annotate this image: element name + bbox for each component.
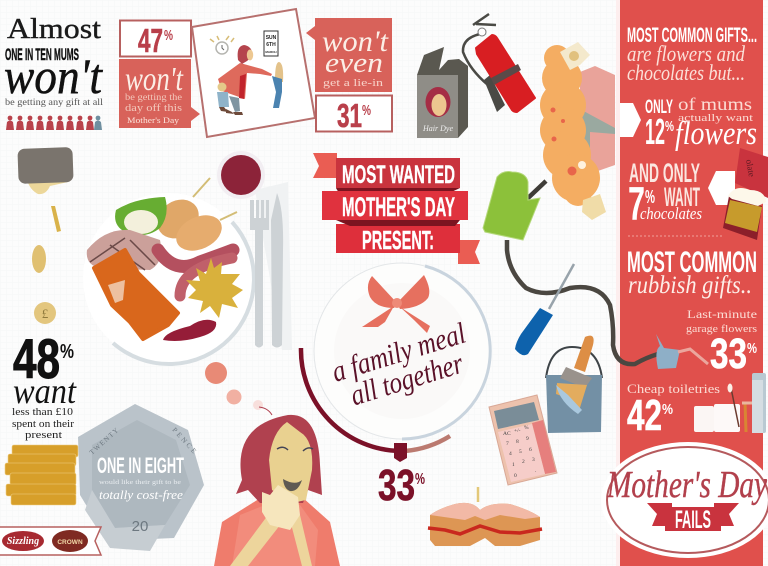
icon: calculator — [489, 395, 557, 485]
icon: calculator: 8 — [516, 439, 519, 445]
text: a family meal all together: all together — [347, 347, 467, 412]
block: almost one in ten mums: be getting any gift at all — [5, 97, 103, 108]
icon: screwdriver — [515, 264, 574, 355]
icon: calculator: +/- — [514, 428, 521, 434]
stat box: 47 percent — [120, 20, 191, 59]
icon: row of ten mums — [6, 116, 102, 130]
block: almost one in ten mums: ONE IN TEN MUMS — [5, 45, 79, 64]
stat box: 31 percent — [316, 96, 392, 134]
callout: won't even get a lie-in — [306, 18, 392, 92]
panel: serving plate — [314, 263, 490, 439]
icon: white hexagon pointer flowers — [620, 103, 641, 137]
heading: most common gifts — [627, 24, 757, 85]
logo: Sizzling: Sizzling — [7, 536, 39, 547]
chart: 33 percent arc gauge — [301, 348, 450, 510]
brand ribbon: logos — [0, 527, 101, 555]
stat: 48 percent want less than ten pounds: 48 — [13, 327, 60, 390]
icon: calendar — [264, 31, 278, 56]
callout: won't even get a lie-in: even — [325, 48, 383, 79]
logo: Crown: CROWN — [57, 539, 83, 546]
heading: most common gifts: are flowers and — [627, 41, 746, 66]
badge: mother's day fails oval — [601, 442, 768, 558]
icon: calculator: 6 — [529, 447, 532, 453]
callout: won't get the day off: day off this — [125, 103, 182, 114]
heading: most common rubbish gifts: rubbish gifts.. — [628, 272, 752, 299]
icon: calculator: % — [524, 425, 529, 431]
thought bubbles — [205, 362, 263, 410]
stat: cheap toiletries 42 percent: % — [662, 401, 673, 418]
ribbon: fails — [647, 503, 739, 534]
icon: calculator: 3 — [532, 457, 535, 463]
panel: twenty pence coin: ONE IN EIGHT — [97, 453, 184, 478]
banner: most wanted present: MOTHER'S DAY — [342, 192, 455, 222]
block: almost one in ten mums: Almost — [7, 14, 101, 45]
icon: calendar: 6TH — [266, 42, 276, 48]
icon: calculator: 2 — [522, 459, 525, 465]
panel: twenty pence coin: would like their gift to be — [99, 479, 181, 486]
stat: only 12 percent want flowers: 12 — [645, 111, 665, 152]
icon: calculator: 4 — [509, 451, 512, 457]
stat: garage flowers 33 percent: garage flowers — [686, 323, 757, 335]
icon: calculator: 9 — [526, 436, 529, 442]
icon: calculator: . — [535, 468, 537, 474]
panel: lie-in illustration card — [192, 9, 315, 137]
chart: 33 percent arc gauge: 33 — [378, 461, 415, 510]
icon: hair dye box — [417, 47, 468, 138]
callout: won't even get a lie-in: won't — [322, 25, 389, 58]
stat: only 12 percent want flowers: % — [665, 118, 674, 135]
stat: only 12 percent want flowers — [645, 94, 757, 152]
stat: only 12 percent want flowers: actually want — [678, 112, 753, 124]
stat: cheap toiletries 42 percent: Cheap toiletries — [627, 381, 720, 396]
banner: most wanted present — [313, 153, 480, 264]
icon: stack of gold coins — [5, 445, 78, 505]
divider: dashed line — [628, 235, 722, 237]
stat box: 31 percent: 31 — [337, 97, 362, 134]
stat: only 12 percent want flowers: ONLY — [645, 97, 673, 118]
icon: calculator: AC — [503, 431, 511, 437]
panel: twenty pence coin: TWENTY — [88, 426, 120, 456]
icon: calendar: SUN — [266, 35, 277, 41]
icon: white hexagon pointer chocolate — [708, 171, 735, 205]
icon: hair dye box: Hair Dye — [422, 124, 453, 133]
icon: calculator: 1 — [512, 462, 515, 468]
icon: half-eaten chocolate bar — [723, 148, 768, 240]
panel: twenty pence coin — [78, 404, 204, 551]
icon: cutlery and sauce — [217, 151, 292, 350]
stat: garage flowers 33 percent: % — [747, 340, 757, 357]
stat: only 7 percent want chocolates: AND ONLY — [629, 158, 700, 188]
icon: broken cake — [428, 487, 542, 546]
stat: garage flowers 33 percent: 33 — [710, 330, 747, 378]
stat box: 31 percent: % — [362, 102, 371, 119]
figure: mum with children — [217, 45, 283, 115]
stat: garage flowers 33 percent — [686, 307, 757, 378]
illustration: dreaming mum — [214, 407, 340, 566]
stat: garage flowers 33 percent: Last-minute — [687, 307, 757, 321]
stat: only 7 percent want chocolates: % — [645, 187, 655, 207]
icon: toilet rolls and toothbrush — [694, 373, 766, 433]
icon: purse dropping coins — [17, 147, 74, 324]
panel: twenty pence coin: 20 — [132, 518, 148, 535]
heading: most common rubbish gifts — [627, 246, 757, 299]
icon: fire extinguisher — [463, 14, 535, 112]
stat: 48 percent want less than ten pounds: present — [25, 429, 62, 441]
callout: won't get the day off: be getting the — [125, 92, 182, 102]
icon: coral bow — [362, 275, 430, 333]
stat: cheap toiletries 42 percent: 42 — [627, 391, 662, 440]
icon: oven glove — [483, 172, 540, 240]
icon: cable with vacuum nozzle — [507, 181, 708, 369]
callout: won't get the day off — [119, 59, 200, 128]
icon: calculator: 7 — [506, 441, 509, 447]
panel: twenty pence coin: PENCE — [171, 426, 198, 455]
icon: alarm clock — [210, 36, 234, 54]
panel: gifts red column — [616, 0, 763, 566]
stat: only 7 percent want chocolates: 7 — [628, 177, 645, 230]
stat: 48 percent want less than ten pounds: spent on their — [12, 418, 74, 430]
stat: 48 percent want less than ten pounds: want — [13, 371, 77, 411]
stat: only 7 percent want chocolates: chocolates — [640, 204, 702, 223]
icon: calculator: 5 — [519, 449, 522, 455]
stat: only 12 percent want flowers: of mums — [678, 94, 752, 114]
icon: garage flowers — [540, 42, 615, 220]
banner: most wanted present: PRESENT: — [362, 225, 434, 255]
stat: 48 percent want less than ten pounds: % — [60, 341, 74, 363]
stat box: 47 percent: 47 — [138, 22, 163, 59]
icon: paint bucket and brush — [546, 336, 602, 433]
stat: only 7 percent want chocolates — [628, 158, 702, 230]
block: almost one in ten mums: won't — [4, 48, 103, 104]
stat: 48 percent want less than ten pounds: less than £10 — [12, 406, 74, 418]
block: almost one in ten mums — [4, 14, 103, 108]
stat box: 47 percent: % — [164, 27, 173, 44]
callout: won't get the day off: Mother's Day — [127, 115, 180, 125]
banner: most wanted present: MOST WANTED — [342, 161, 455, 189]
callout: won't get the day off: won't — [125, 61, 184, 98]
panel: twenty pence coin: totally cost-free — [99, 487, 183, 502]
icon: calculator: 0 — [514, 473, 517, 479]
icon: purse dropping coins: £ — [42, 306, 49, 321]
chart: 33 percent arc gauge: % — [415, 471, 425, 488]
text: a family meal all together — [328, 317, 469, 412]
stat: 48 percent want less than ten pounds — [12, 327, 77, 441]
illustration: roast dinner plate — [83, 151, 292, 364]
icon: calendar: MARCH — [265, 50, 277, 54]
stat: cheap toiletries 42 percent — [627, 381, 720, 440]
callout: won't even get a lie-in: get a lie-in — [323, 78, 383, 89]
text: a family meal all together: a family meal — [328, 317, 469, 389]
text: WANT — [664, 182, 700, 212]
icon: half-eaten chocolate bar: olate — [744, 159, 757, 178]
ribbon: fails: FAILS — [675, 506, 711, 534]
heading: most common gifts: chocolates but... — [627, 60, 745, 85]
